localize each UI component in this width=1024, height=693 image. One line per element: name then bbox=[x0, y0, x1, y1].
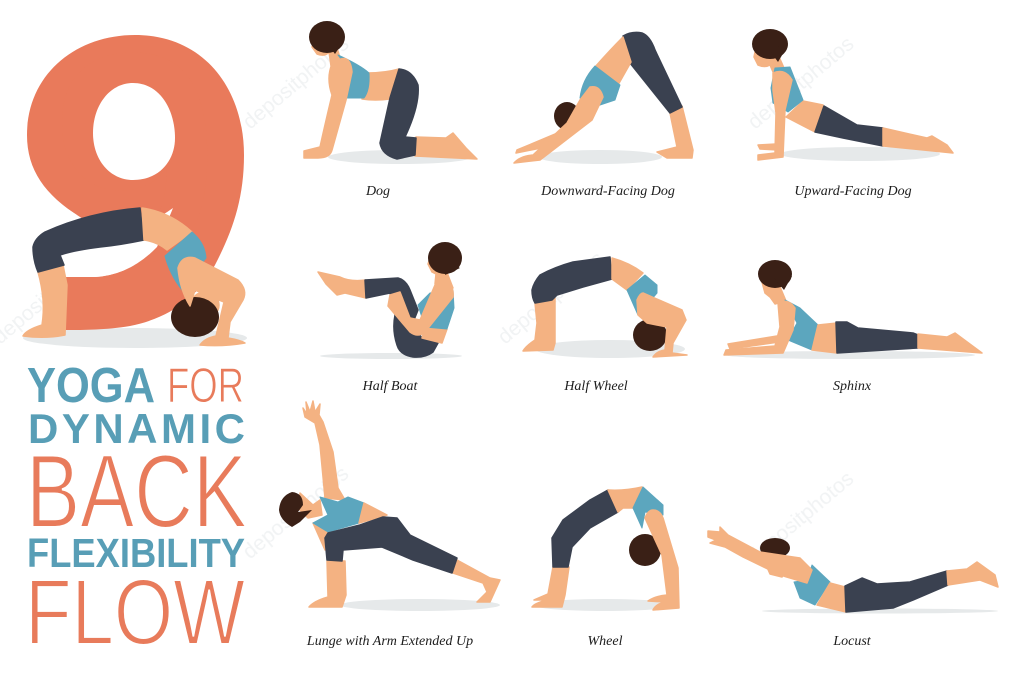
big number 9 bbox=[23, 0, 247, 348]
figure: main half wheel pose bbox=[23, 208, 245, 346]
text: depositphotos bbox=[238, 32, 353, 134]
text: depositphotos bbox=[493, 247, 608, 349]
figure: Lunge with Arm Extended Up bbox=[279, 401, 500, 611]
title: yoga for dynamic back flexibility flow: FOR bbox=[167, 359, 244, 413]
title: yoga for dynamic back flexibility flow: FLEXIBILITY bbox=[27, 530, 245, 576]
text: depositphotos bbox=[238, 462, 353, 564]
figure: Wheel bbox=[532, 487, 679, 611]
caption: Lunge with Arm Extended Up: Lunge with Arm Extended Up bbox=[306, 634, 473, 649]
caption: Locust: Locust bbox=[832, 634, 872, 649]
text: depositphotos bbox=[743, 32, 858, 134]
figure: Upward-Facing Dog bbox=[752, 29, 953, 161]
caption: Sphinx: Sphinx bbox=[833, 379, 872, 394]
caption: Dog: Dog bbox=[365, 184, 390, 199]
figure: Half Wheel bbox=[523, 257, 687, 358]
title: yoga for dynamic back flexibility flow: YOGA bbox=[27, 359, 155, 413]
title: yoga for dynamic back flexibility flow: DYNAMIC bbox=[28, 405, 245, 452]
caption: Half Boat: Half Boat bbox=[362, 379, 419, 394]
caption: Half Wheel: Half Wheel bbox=[563, 379, 628, 394]
figure: Downward-Facing Dog bbox=[514, 32, 693, 164]
title: yoga for dynamic back flexibility flow bbox=[25, 359, 247, 664]
figure: Dog pose bbox=[304, 21, 477, 164]
title: yoga for dynamic back flexibility flow: FLOW bbox=[25, 560, 245, 664]
figure: Sphinx bbox=[724, 260, 982, 359]
title: yoga for dynamic back flexibility flow: BACK bbox=[26, 434, 247, 550]
caption: Downward-Facing Dog: Downward-Facing Dog bbox=[540, 184, 675, 199]
figure: Half Boat bbox=[318, 242, 462, 359]
caption: Wheel: Wheel bbox=[588, 634, 623, 649]
big number 9: 9 bbox=[52, 0, 218, 326]
figure: Locust bbox=[708, 527, 998, 614]
text: depositphotos bbox=[743, 467, 858, 569]
caption: Upward-Facing Dog: Upward-Facing Dog bbox=[794, 184, 912, 199]
